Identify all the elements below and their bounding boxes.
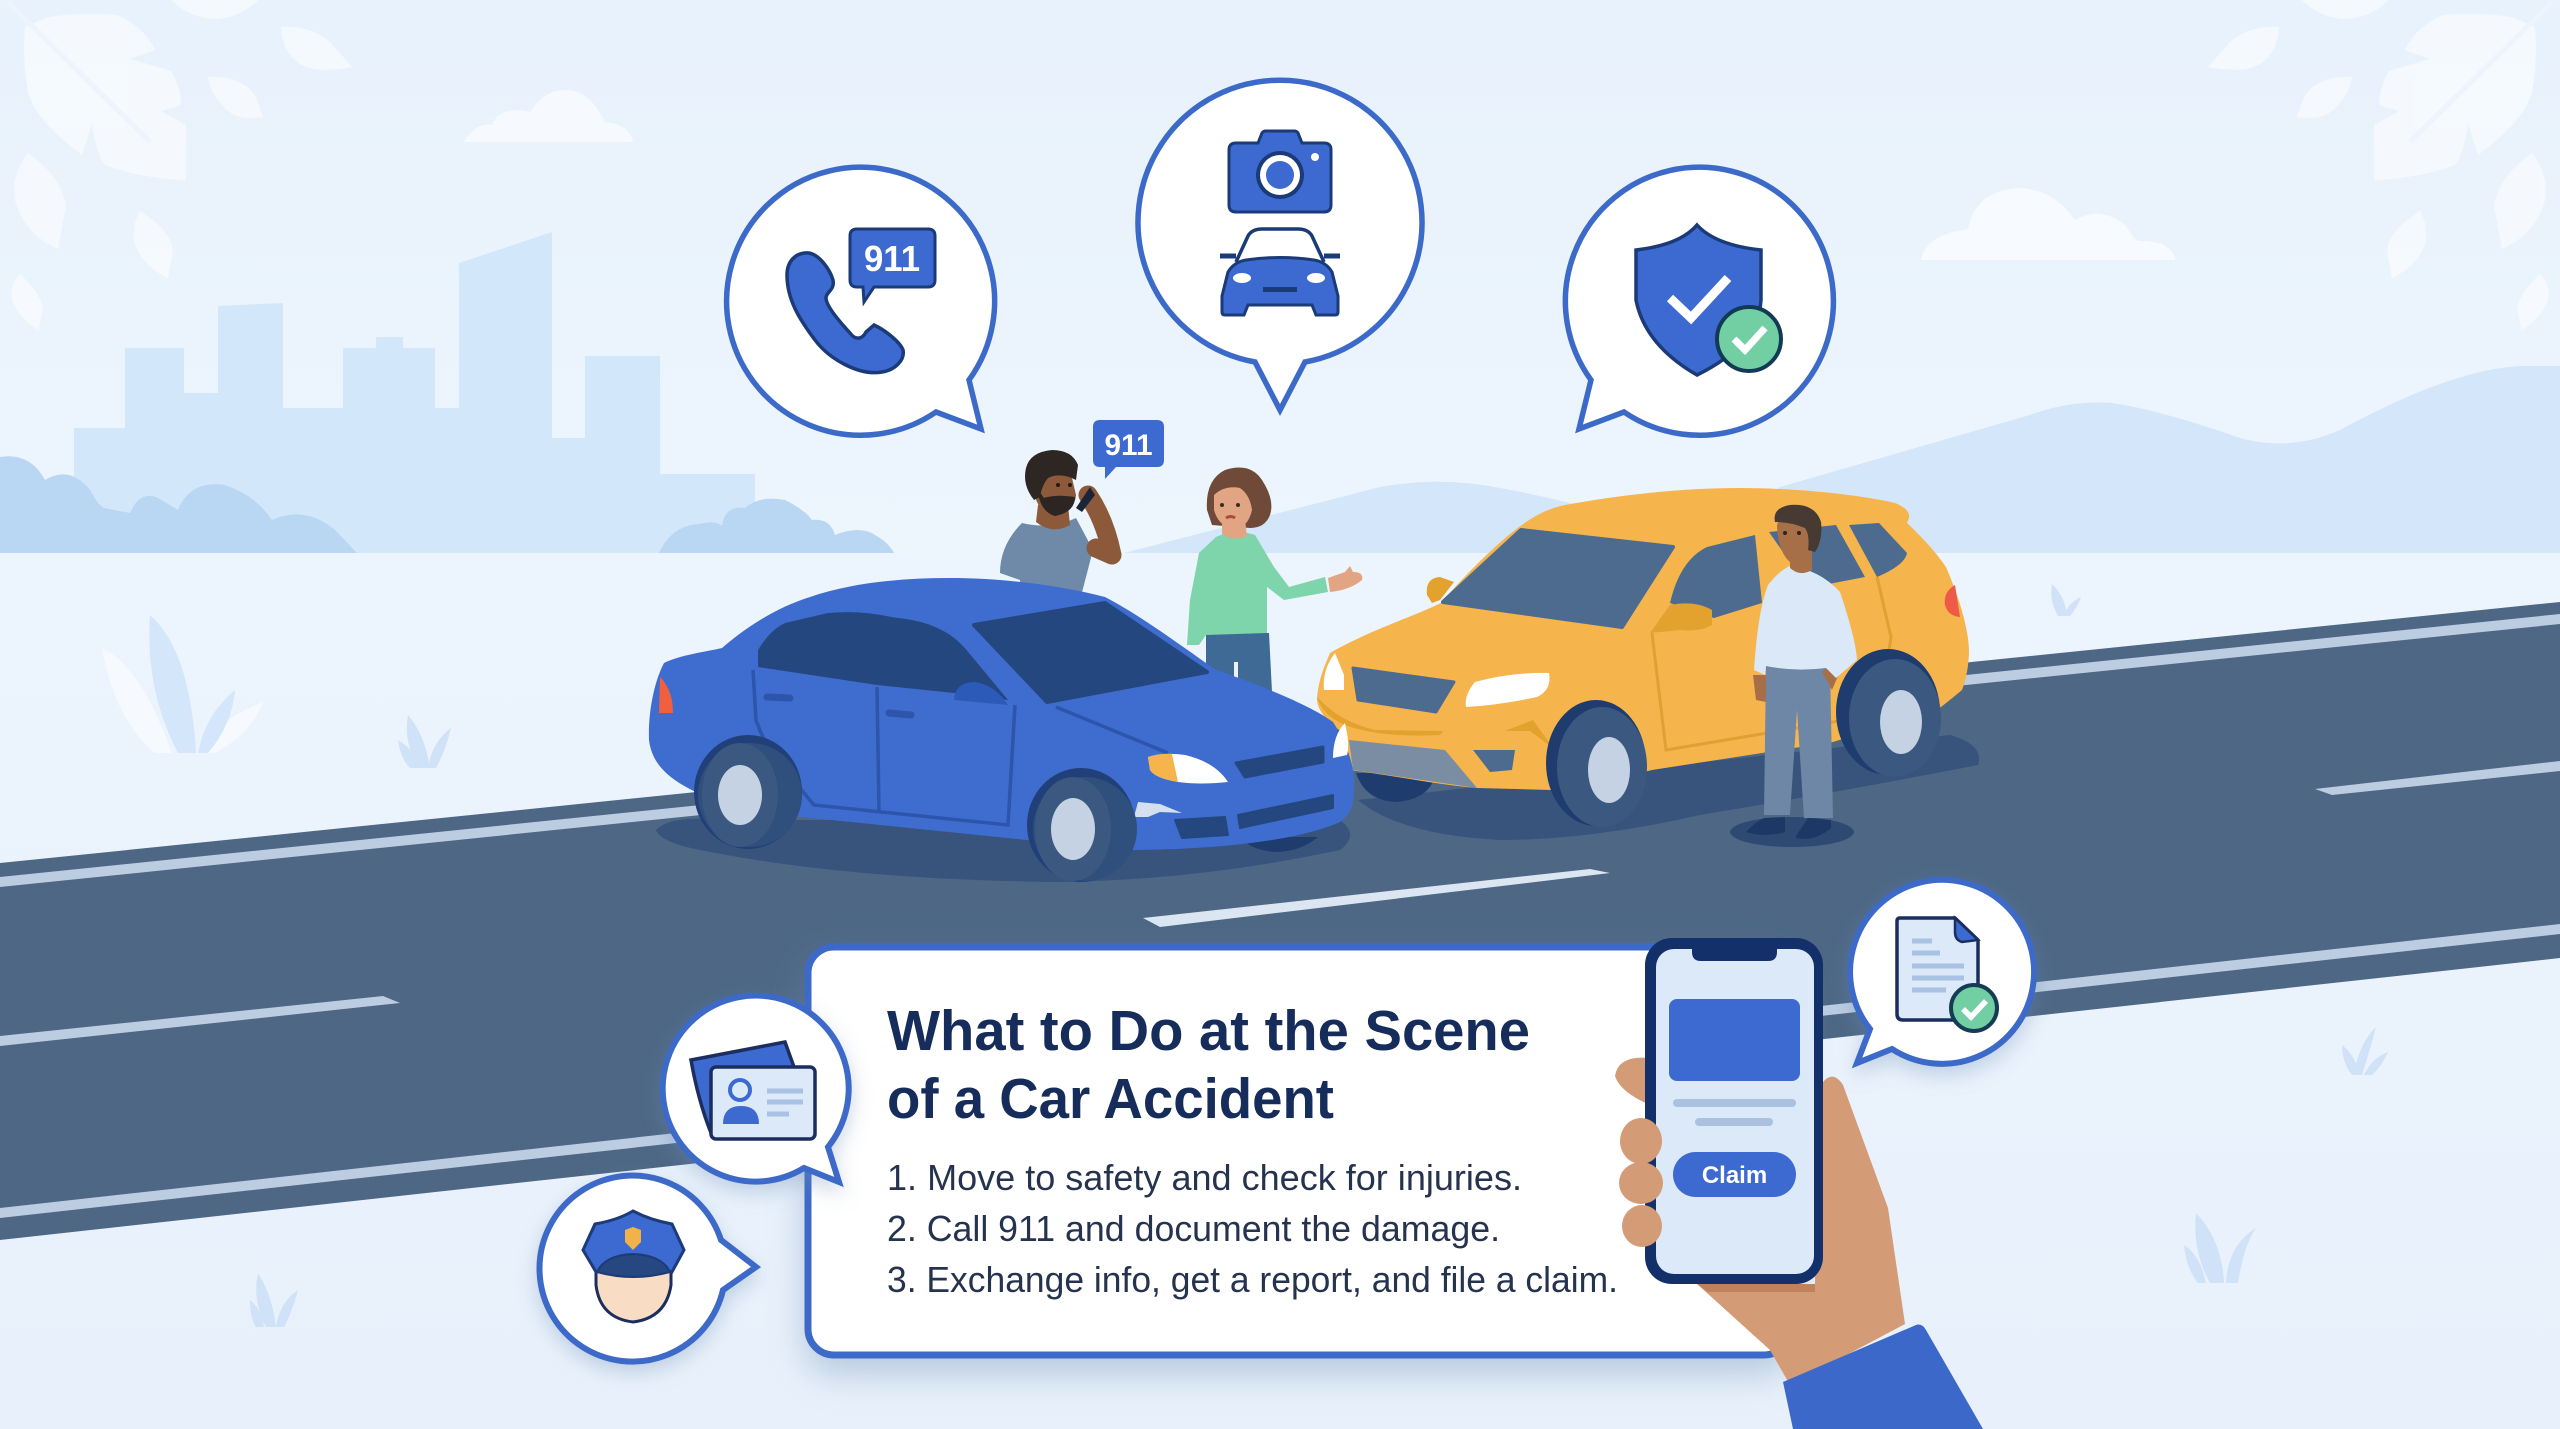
hills [1124,366,2560,553]
yellow SUV front wheel [1546,700,1647,827]
title: What to Do at the Scene [887,999,1530,1063]
blue sedan grille [1236,747,1323,777]
phone screen text lines [1673,1099,1796,1107]
steps list: 1. Move to safety and check for injuries. [887,1157,1522,1198]
claim button [1673,1152,1796,1197]
yellow SUV lower bumper [1349,740,1477,788]
blue sedan headlight [1148,754,1228,784]
blue sedan body [649,578,1354,850]
leaves top right [2208,0,2552,330]
yellow SUV rear wheel [1836,649,1941,777]
centre dash right [2315,761,2560,795]
background ground [0,553,2560,1429]
yellow SUV door lines [1652,577,1891,750]
bubble: police officer [540,1176,756,1362]
steps list: 2. Call 911 and document the damage. [887,1208,1500,1249]
car shadows [656,735,1979,882]
blue sedan door lines [753,670,1168,825]
bubble: document with check [1850,880,2034,1064]
blue sedan [649,578,1354,882]
background sky [0,0,2560,553]
small 911 speech tag [1093,420,1164,479]
info card [808,947,1790,1355]
blue sedan side mirror [954,682,1008,705]
icon: 911 speech box [850,229,935,302]
claim button: Claim [1702,1162,1767,1189]
icon: ID cards [691,1042,815,1139]
icon: camera [1229,131,1331,212]
blue sedan side windows [758,612,1008,700]
bubble: call 911 [727,167,995,435]
centre dash middle [1143,869,1610,927]
icon: car front [1220,229,1340,315]
blue sedan dent [1134,802,1182,817]
icon: police face and cap [583,1211,684,1322]
yellow SUV [1317,488,1969,827]
hand top finger [1615,1058,1650,1105]
icon: shield with check [1636,225,1761,375]
yellow SUV fog lamp [1473,750,1515,772]
hand palm and thumb [1697,1077,1905,1385]
blue sedan handles [767,697,911,715]
person: man on phone [1000,450,1112,600]
road edge line lower [0,924,2560,1218]
small 911 speech tag: 911 [1104,429,1152,462]
steps list: 3. Exchange info, get a report, and file a claim. [887,1259,1618,1300]
icon: document [1897,918,1978,1020]
icon: green check badge [1717,307,1781,371]
city skyline [74,232,755,553]
cloud left [464,90,633,142]
blue sedan rear wheel [694,735,802,849]
yellow SUV mirrors [1427,577,1712,633]
leaves top left [8,0,352,330]
yellow SUV body [1317,488,1969,790]
sleeve [1783,1325,1983,1429]
cloud right [1921,188,2176,260]
blue sedan front under tyre [1240,837,1318,852]
bushes left [0,456,357,553]
icon: 911 speech box: 911 [864,238,920,279]
road edge line upper [0,614,2560,887]
person: man in white sweater [1730,505,1857,847]
yellow SUV taillight [1945,585,1960,617]
yellow SUV headlights [1324,653,1550,707]
bubble: exchange ID [663,996,849,1182]
yellow SUV grille [1353,668,1454,712]
blue sedan taillight [659,677,673,713]
grass tuft large left [102,615,263,753]
centre dash left [0,996,400,1046]
bubble: photograph damage [1138,80,1422,410]
yellow SUV windshield [1443,530,1673,627]
bushes right [659,499,894,553]
yellow SUV under tyre [1356,773,1436,802]
icon: phone handset [787,253,903,373]
blue sedan front wheel [1027,768,1137,882]
phone [1645,938,1823,1284]
phone screen panel [1669,999,1800,1081]
steps list [887,1157,1618,1300]
hand holding phone [1615,938,1983,1429]
yellow SUV bumper crease [1317,697,1553,748]
hand fingers [1619,1118,1663,1247]
person: woman in green [1187,468,1362,692]
bubble: insurance [1565,167,1833,435]
road [0,602,2560,1240]
blue sedan windshield [974,603,1207,702]
title [887,999,1530,1131]
hand wrist shade [1697,1284,1815,1292]
icon: green check badge [1951,985,1997,1031]
grass tufts small [250,584,2388,1327]
yellow SUV side windows [1670,535,1762,618]
title: of a Car Accident [887,1067,1334,1131]
